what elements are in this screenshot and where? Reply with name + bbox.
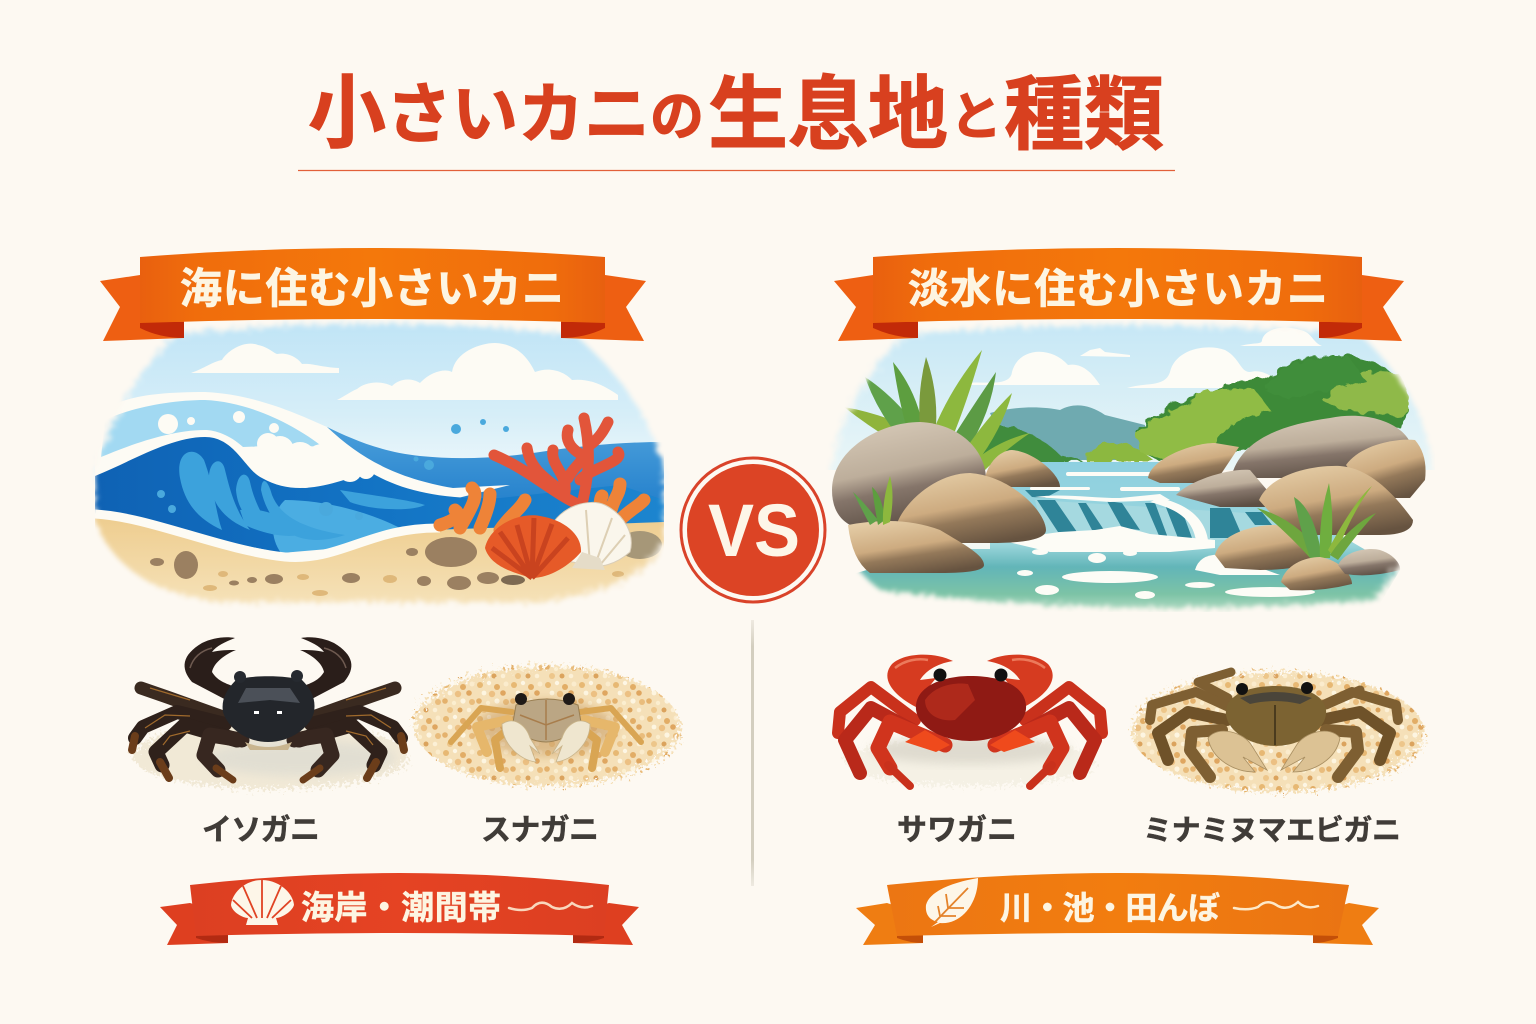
waterfall stripes xyxy=(1025,490,1280,540)
title: の xyxy=(650,87,704,147)
pale sand under crab xyxy=(128,726,412,796)
label: サワガニ: サワガニ xyxy=(897,814,1017,847)
banner text: 淡水に住む小さいカニ xyxy=(908,266,1328,312)
small sea bubbles xyxy=(157,419,509,520)
crab: スナガニ illustration xyxy=(408,660,684,790)
river surface lines xyxy=(1030,472,1180,491)
coral red xyxy=(440,418,644,530)
rocks front xyxy=(1281,549,1400,590)
title: さいカニ xyxy=(386,77,650,151)
icon: shell xyxy=(231,880,294,925)
panel: freshwater habitat scene xyxy=(825,310,1435,612)
banner: freshwater heading xyxy=(834,248,1404,341)
wave swirls xyxy=(179,452,425,540)
grass small left xyxy=(853,476,892,525)
title: 生息地 xyxy=(708,70,948,159)
label: イソガニ: イソガニ xyxy=(202,814,320,847)
foam xyxy=(158,411,375,488)
sand xyxy=(95,517,664,610)
title underline xyxy=(298,170,1175,172)
sky xyxy=(122,320,665,478)
VS badge xyxy=(681,458,825,602)
trees xyxy=(975,355,1408,465)
banner text: 海に住む小さいカニ xyxy=(180,265,564,312)
mountain xyxy=(990,405,1145,460)
coral orange xyxy=(440,484,644,530)
rocks left xyxy=(832,422,1060,573)
grass back left xyxy=(844,350,1030,470)
river water xyxy=(850,462,1400,612)
divider xyxy=(751,620,754,886)
wave crest white xyxy=(95,392,510,498)
crab: ミナミヌマエビガニ illustration xyxy=(1128,666,1429,798)
title xyxy=(308,69,1164,161)
wave crest translucent xyxy=(101,400,323,457)
icon: waves xyxy=(1234,902,1318,909)
panel: sea habitat scene xyxy=(90,310,670,610)
sky xyxy=(825,310,1435,470)
banner: sea heading xyxy=(100,248,646,341)
main dark wave xyxy=(95,437,664,553)
far sea xyxy=(327,427,664,500)
white foam xyxy=(962,526,1315,599)
grass right xyxy=(1257,483,1376,560)
crab: イソガニ illustration xyxy=(128,637,412,796)
crab: サワガニ illustration xyxy=(832,654,1108,792)
banner text: 川・池・田んぼ xyxy=(1000,890,1220,926)
rocks right xyxy=(1148,416,1426,570)
label: スナガニ: スナガニ xyxy=(481,814,599,847)
icon: leaf xyxy=(926,878,978,927)
lower light water xyxy=(273,500,400,553)
title: 小 xyxy=(308,69,386,158)
pebbles xyxy=(150,531,662,590)
label: ミナミヌマエビガニ: ミナミヌマエビガニ xyxy=(1143,814,1401,847)
title: と xyxy=(950,89,1002,147)
icon: waves xyxy=(509,903,592,910)
shell orange xyxy=(485,515,581,578)
VS text: VS xyxy=(708,489,800,572)
title: 種類 xyxy=(1004,71,1164,161)
banner text: 海岸・潮間帯 xyxy=(301,889,501,926)
clouds xyxy=(960,328,1322,388)
banner: freshwater habitat xyxy=(856,873,1379,945)
shell white xyxy=(549,502,631,570)
clouds xyxy=(191,343,618,400)
banner: coast habitat xyxy=(160,873,639,945)
shoreline foam xyxy=(95,514,440,557)
